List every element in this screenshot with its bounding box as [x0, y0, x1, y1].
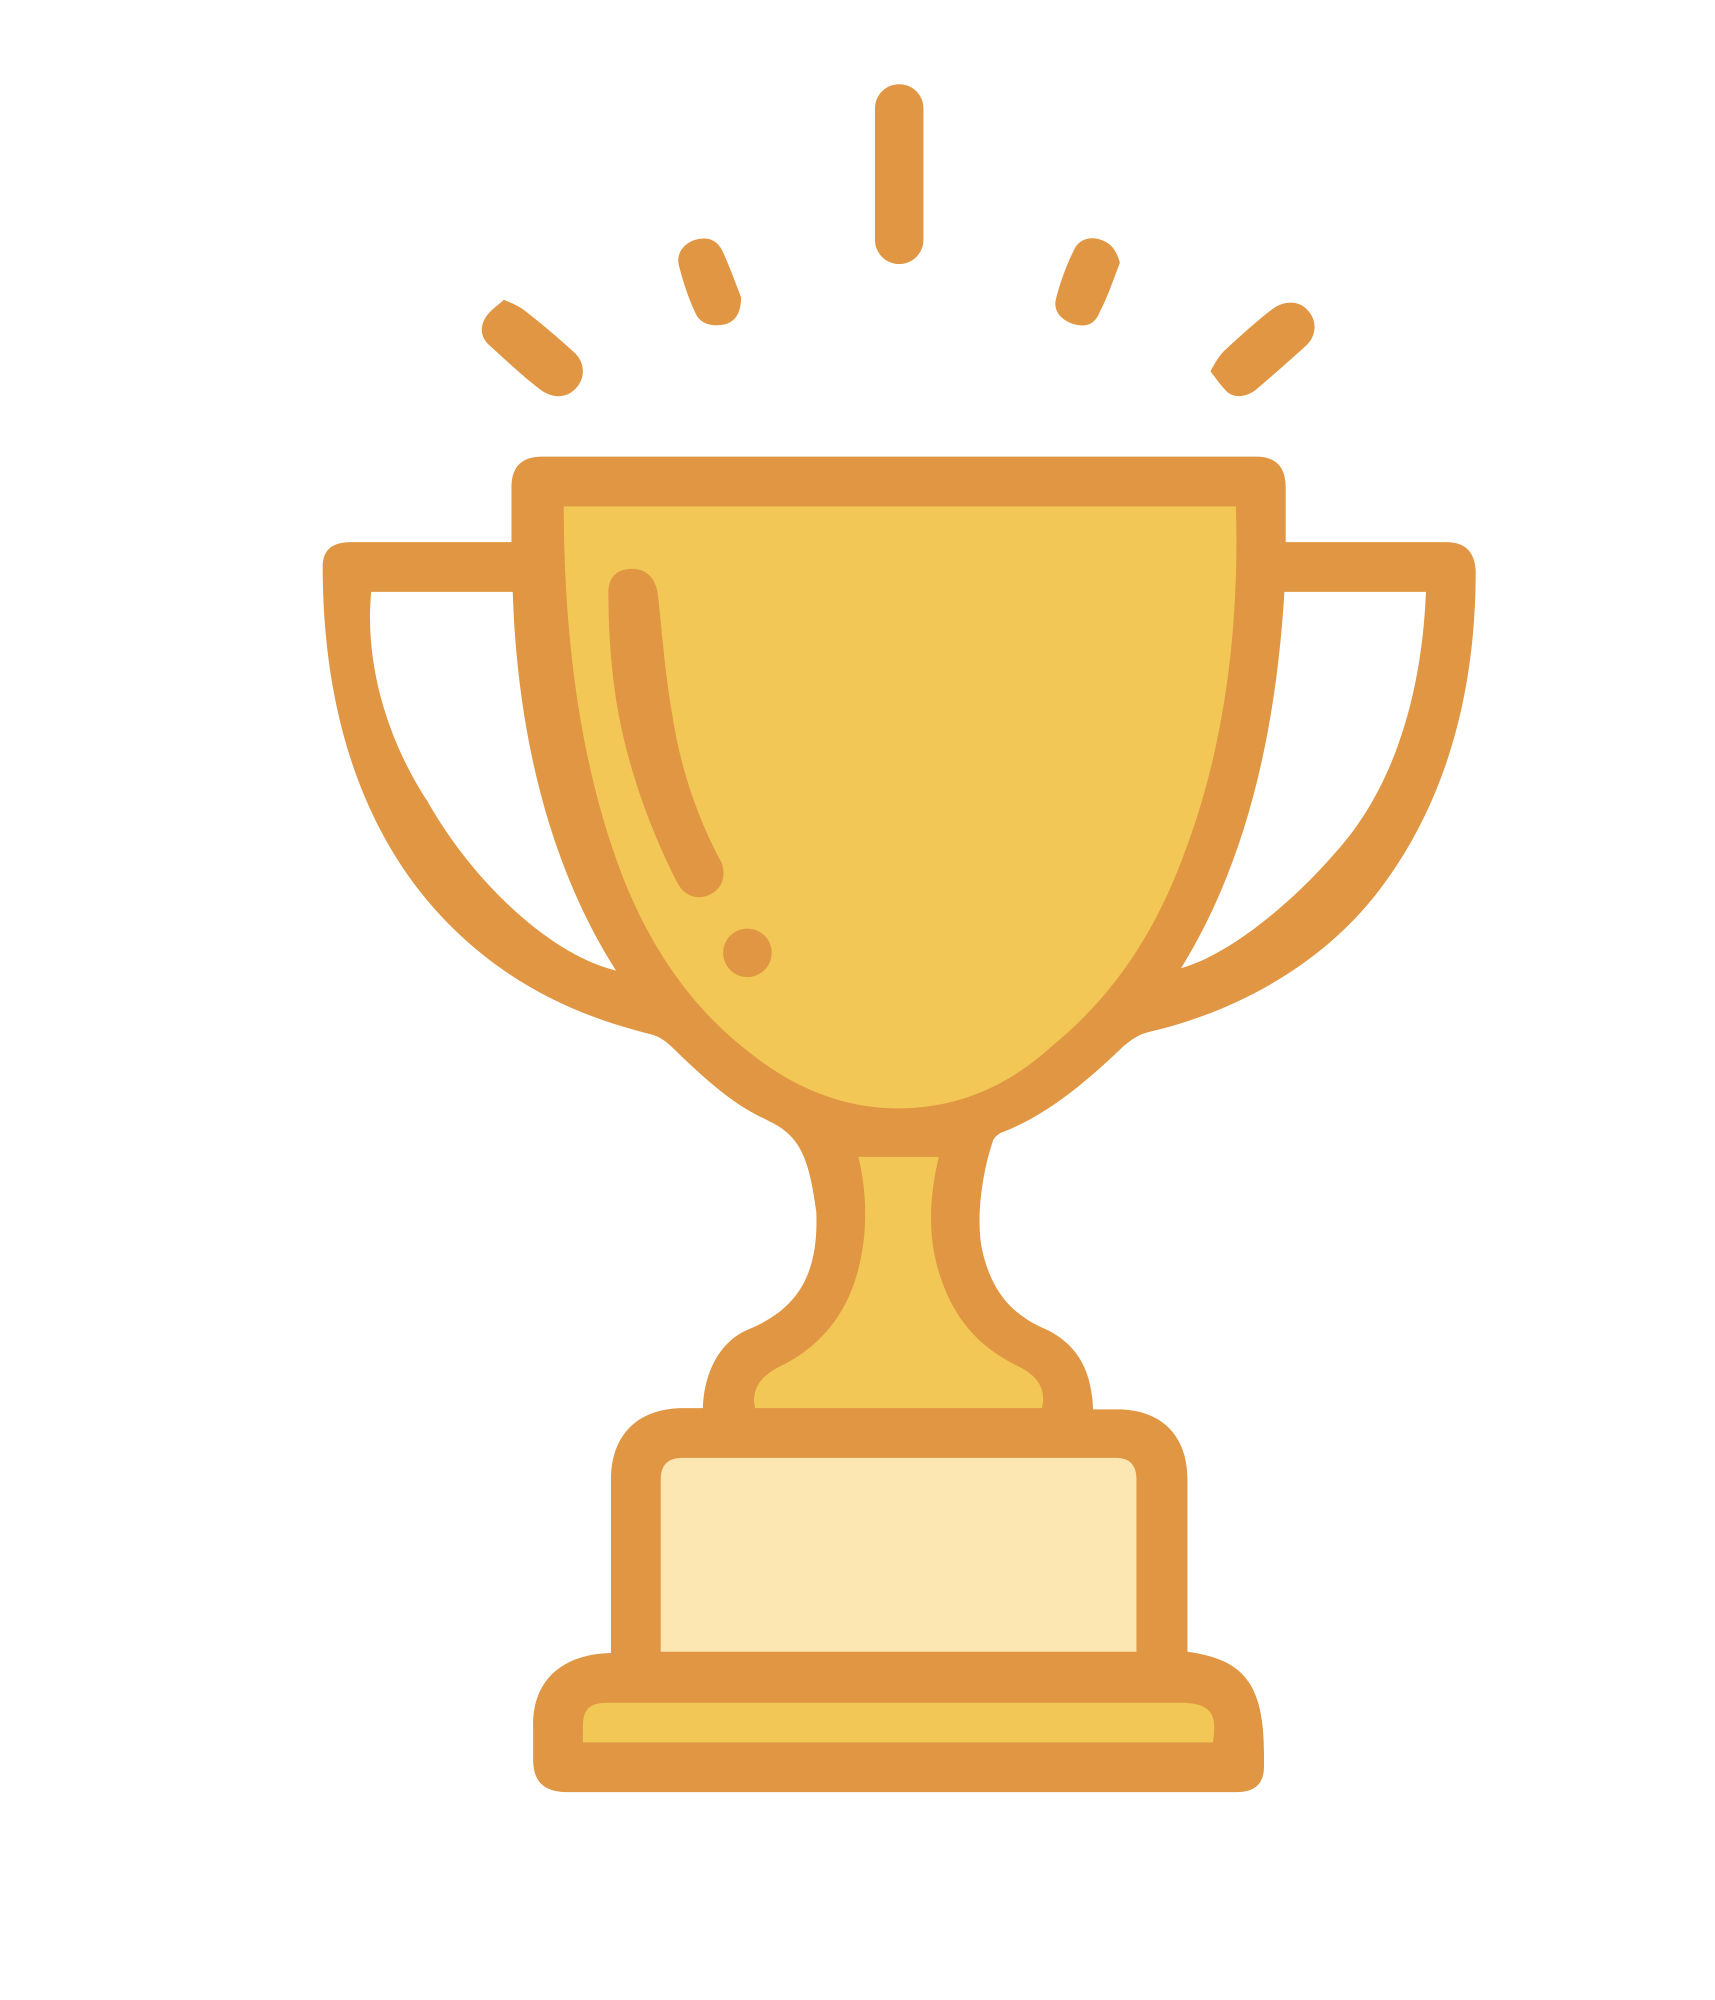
ray: inner right: [1055, 238, 1120, 326]
base fill: [583, 1703, 1214, 1742]
ray: outer right: [1210, 303, 1315, 396]
trophy outline silhouette: [323, 457, 1476, 1792]
icon: shine rays: [482, 84, 1315, 396]
cup fill: [564, 506, 1236, 1108]
left handle opening: [370, 592, 616, 971]
ray: centre: [875, 84, 923, 264]
trophy body: [323, 457, 1476, 1792]
stem fill: [754, 1157, 1043, 1408]
ray: inner left: [678, 239, 741, 325]
ray: outer left: [482, 300, 583, 396]
nameplate panel: [661, 1458, 1136, 1652]
cup highlight dot: [723, 929, 772, 977]
cup highlight stroke: [608, 569, 723, 897]
right handle opening: [1181, 592, 1426, 968]
